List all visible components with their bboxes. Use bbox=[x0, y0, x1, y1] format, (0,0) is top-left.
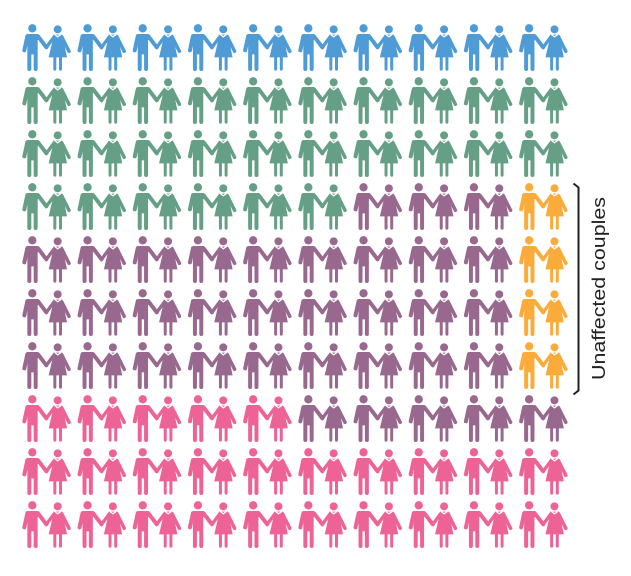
row 10: pink couples bbox=[24, 501, 566, 548]
row 2: green couples bbox=[24, 77, 566, 124]
row 4: green, purple and orange couples bbox=[24, 183, 566, 230]
row 4 purple couples bbox=[356, 183, 511, 230]
label: Unaffected couples: Unaffected couples bbox=[589, 197, 609, 380]
row 8 pink couples bbox=[24, 395, 290, 442]
row 7 orange couple bbox=[521, 342, 566, 389]
row 6 purple couples bbox=[24, 289, 511, 336]
row 5: purple and orange couples bbox=[24, 236, 566, 283]
row 1: blue couples bbox=[24, 24, 566, 71]
row 5 orange couple bbox=[521, 236, 566, 283]
row 4 orange couple bbox=[521, 183, 566, 230]
row 7: purple and orange couples bbox=[24, 342, 566, 389]
row 4 green couples bbox=[24, 183, 345, 230]
row 6: purple and orange couples bbox=[24, 289, 566, 336]
bracket bbox=[574, 184, 578, 394]
row 9: pink couples bbox=[24, 448, 566, 495]
row 5 purple couples bbox=[24, 236, 511, 283]
row 3: green couples bbox=[24, 130, 566, 177]
row 7 purple couples bbox=[24, 342, 511, 389]
row 6 orange couple bbox=[521, 289, 566, 336]
row 8 purple couples bbox=[300, 395, 566, 442]
row 8: pink and purple couples bbox=[24, 395, 566, 442]
